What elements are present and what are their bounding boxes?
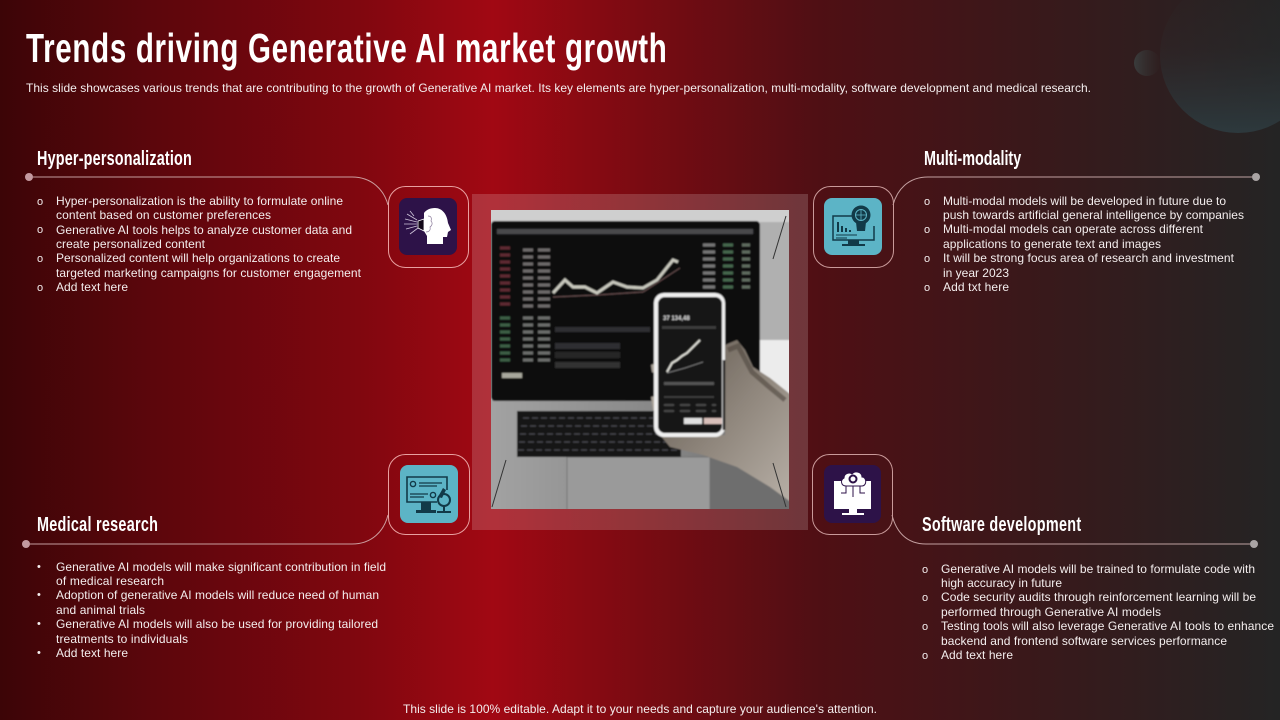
bullet list: medical research: • bbox=[37, 589, 41, 601]
bullet list: medical research: of medical research bbox=[56, 574, 164, 588]
bullet list: multi-modality: o bbox=[924, 224, 930, 236]
bullet list: software development: Add text here bbox=[941, 648, 1013, 662]
icon frame: multi-modality bbox=[814, 186, 894, 268]
bullet list: multi-modality: applications to generate text and images bbox=[943, 237, 1161, 251]
bullet list: medical research: Generative AI models will also be used for providing tailored bbox=[56, 617, 378, 631]
heading: multi-modality: Multi-modality bbox=[924, 147, 1021, 170]
bullet list: medical research: Add text here bbox=[56, 646, 128, 660]
icon: cloud and code monitor bbox=[824, 465, 881, 523]
connector: medical research bbox=[22, 515, 388, 548]
bullet list: multi-modality: push towards artificial general intelligence by companies bbox=[943, 208, 1244, 222]
panel: medical research bbox=[22, 454, 470, 660]
bullet list: software development: backend and frontend software services performance bbox=[941, 634, 1227, 648]
bullet list: multi-modality: o bbox=[924, 196, 930, 208]
bullet list: hyper-personalization: Add text here bbox=[56, 280, 128, 294]
decorative circles bbox=[1134, 0, 1280, 133]
bullet list: multi-modality bbox=[924, 194, 1244, 294]
bullet list: hyper-personalization: Personalized content will help organizations to create bbox=[56, 251, 340, 265]
panel: software development bbox=[812, 454, 1274, 662]
bullet list: medical research: and animal trials bbox=[56, 603, 145, 617]
connector: multi-modality bbox=[893, 173, 1260, 205]
connector: software development bbox=[892, 515, 1258, 548]
footer note: This slide is 100% editable. Adapt it to your needs and capture your audience's attention. bbox=[403, 702, 877, 716]
connector: hyper-personalization bbox=[25, 173, 388, 205]
bullet list: multi-modality: It will be strong focus area of research and investment bbox=[943, 251, 1235, 265]
bullet list: software development: o bbox=[922, 564, 928, 576]
bullet list: software development: o bbox=[922, 650, 928, 662]
bullet list: medical research: treatments to individuals bbox=[56, 632, 188, 646]
bullet list: multi-modality: Multi-modal models can operate across different bbox=[943, 222, 1204, 236]
bullet list: software development bbox=[922, 562, 1274, 662]
bullet list: software development: performed through Generative AI models bbox=[941, 605, 1161, 619]
icon: head with brain bbox=[399, 198, 457, 255]
icon frame: medical research bbox=[388, 454, 470, 534]
bullet list: hyper-personalization: o bbox=[37, 224, 43, 236]
bullet list: medical research: Generative AI models will make significant contribution in field bbox=[56, 560, 386, 574]
image frame bbox=[472, 194, 808, 530]
bullet list: medical research: Adoption of generative AI models will reduce need of human bbox=[56, 588, 379, 602]
bullet list: medical research: • bbox=[37, 647, 41, 659]
bullet list: medical research: • bbox=[37, 561, 41, 573]
icon: monitor with microscope bbox=[400, 465, 458, 523]
bullet list: software development: Code security audits through reinforcement learning will be bbox=[941, 590, 1256, 604]
bullet list: multi-modality: Multi-modal models will be developed in future due to bbox=[943, 194, 1226, 208]
photo: laptop and phone showing stock charts bbox=[485, 205, 795, 515]
bullet list: hyper-personalization: o bbox=[37, 253, 43, 265]
bullet list: hyper-personalization: content based on customer preferences bbox=[56, 208, 271, 222]
heading: medical research: Medical research bbox=[37, 513, 158, 536]
panel: multi-modality bbox=[814, 147, 1260, 294]
bullet list: hyper-personalization: Generative AI tools helps to analyze customer data and bbox=[56, 223, 352, 237]
bullet list: software development: Testing tools will also leverage Generative AI tools to enhance bbox=[941, 619, 1274, 633]
subtitle: This slide showcases various trends that are contributing to the growth of Generative AI market. Its key elements are hyper-personalization, multi-modality, software development and medical research. bbox=[26, 81, 1091, 95]
bullet list: software development: Generative AI models will be trained to formulate code with bbox=[941, 562, 1255, 576]
icon frame: software development bbox=[812, 454, 892, 534]
bullet list: multi-modality: in year 2023 bbox=[943, 266, 1009, 280]
bullet list: multi-modality: o bbox=[924, 253, 930, 265]
icon: monitor with light bulb bbox=[824, 198, 882, 255]
bullet list: medical research bbox=[37, 560, 386, 660]
bullet list: multi-modality: Add txt here bbox=[943, 280, 1009, 294]
bullet list: multi-modality: o bbox=[924, 282, 930, 294]
bullet list: hyper-personalization: o bbox=[37, 196, 43, 208]
bullet list: hyper-personalization: targeted marketing campaigns for customer engagement bbox=[56, 266, 362, 280]
bullet list: hyper-personalization bbox=[37, 194, 362, 294]
heading: software development: Software development bbox=[922, 513, 1081, 536]
bullet list: software development: o bbox=[922, 621, 928, 633]
heading: hyper-personalization: Hyper-personalization bbox=[37, 147, 192, 170]
panel: hyper-personalization bbox=[25, 147, 468, 294]
bullet list: hyper-personalization: create personalized content bbox=[56, 237, 206, 251]
bullet list: hyper-personalization: o bbox=[37, 282, 43, 294]
icon frame: hyper-personalization bbox=[388, 186, 468, 268]
bullet list: software development: o bbox=[922, 592, 928, 604]
bullet list: hyper-personalization: Hyper-personalization is the ability to formulate online bbox=[56, 194, 343, 208]
bullet list: medical research: • bbox=[37, 618, 41, 630]
photo: laptop and phone showing stock charts: 37 134,48 bbox=[663, 316, 690, 322]
bullet list: software development: high accuracy in future bbox=[941, 576, 1062, 590]
title: Trends driving Generative AI market growth bbox=[26, 25, 667, 71]
